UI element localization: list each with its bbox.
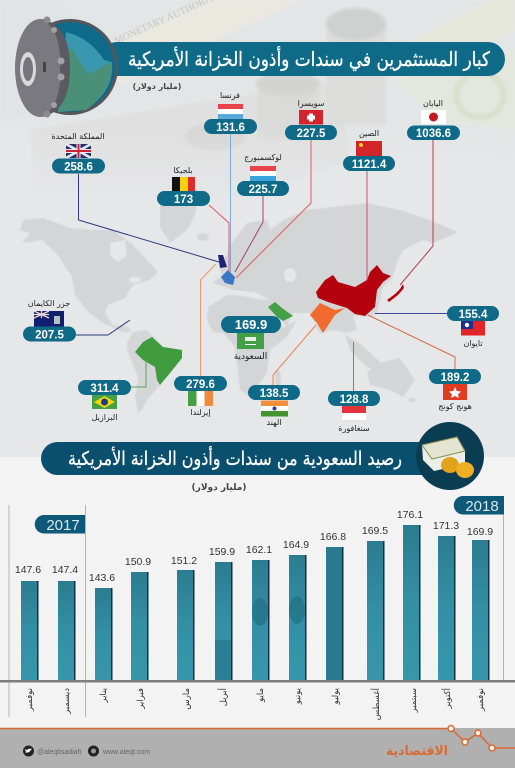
investor: singapore: 128.8 [340, 394, 369, 406]
bar: november 2017: 147.6 [15, 564, 41, 576]
year separators [9, 496, 504, 717]
investor: united kingdom [51, 132, 105, 174]
bar: june 2018 [283, 539, 309, 680]
bar: april 2018 [209, 546, 235, 680]
bar: february 2018 [125, 556, 151, 680]
month labels: أغسطس [370, 688, 382, 720]
investor: china: 1121.4 [352, 159, 387, 171]
section 2 title text: رصيد السعودية من سندات وأذون الخزانة الأمريكية [68, 446, 402, 470]
line: belgium [209, 205, 229, 272]
line: switzerland [236, 140, 311, 278]
investor: japan: 1036.6 [416, 128, 451, 140]
line: singapore [352, 342, 354, 391]
investor: india: الهند [267, 418, 281, 427]
map: north america [20, 218, 158, 332]
month labels: يناير [99, 687, 109, 704]
investor: hong kong: 189.2 [441, 372, 469, 384]
country: japan [387, 284, 404, 302]
bar: november 2018: 169.9 [467, 526, 493, 538]
bar: february 2018: 150.9 [125, 556, 151, 568]
bar: march 2018: 151.2 [171, 555, 197, 567]
investor: belgium: بلجيكا [173, 166, 193, 175]
month labels: مارس [182, 688, 192, 710]
map: iceland [197, 233, 209, 241]
background photo: banknotes and coins [0, 0, 515, 200]
month labels: سبتمبر [409, 688, 419, 713]
logo: الاقتصادية [386, 744, 448, 759]
background: map section [0, 0, 515, 457]
icon: twitter [23, 746, 34, 756]
bar: march 2018 [171, 555, 197, 680]
month labels: يونيو [293, 687, 303, 705]
investor: brazil: البرازيل [92, 413, 117, 422]
map: africa [207, 295, 297, 397]
bar: october 2018: 171.3 [433, 520, 459, 532]
country: saudi arabia [268, 302, 293, 321]
year tab: 2018 [454, 496, 504, 515]
line: ireland [200, 264, 216, 376]
bar: june 2018: 164.9 [283, 539, 309, 551]
investor: switzerland: سويسرا [298, 99, 325, 108]
line: france [230, 134, 232, 272]
twitter handle: @aleqtisadiah [37, 749, 82, 756]
month labels: ديسمبر [62, 688, 72, 715]
investor: taiwan [447, 306, 499, 348]
subtitle: unit: (مليار دولار) [133, 82, 181, 91]
bar: september 2018: 176.1 [397, 509, 423, 521]
icon: bank vault door [15, 16, 118, 118]
country: france [221, 270, 235, 285]
line: luxembourg [235, 196, 263, 272]
bar: april 2018: 159.9 [209, 546, 235, 558]
icon: website [88, 746, 99, 756]
bar: august 2018: 169.5 [362, 525, 388, 537]
footer [0, 726, 515, 768]
month labels: نوفمبر [476, 688, 486, 712]
background: chart section [0, 457, 515, 728]
investor: taiwan: 155.4 [459, 309, 488, 321]
investor: cayman islands: 207.5 [35, 330, 64, 342]
investor: cayman islands [23, 299, 76, 342]
map highlighted countries [135, 255, 404, 385]
investor: china [343, 129, 395, 171]
investor: switzerland [285, 99, 337, 140]
investor: india: 138.5 [260, 388, 289, 400]
investor: france [204, 91, 257, 134]
investor: luxembourg [237, 153, 289, 196]
bar: may 2018 [246, 544, 272, 680]
investor: singapore: سنغافورة [338, 424, 370, 433]
year tab: 2018: 2018 [465, 498, 499, 515]
line: cayman islands [76, 320, 130, 335]
investor: saudi arabia: 169.9 [235, 317, 267, 332]
investor: brazil: 311.4 [90, 383, 119, 395]
map: greenland [160, 200, 197, 243]
subtitle: unit chart: (مليار دولار) [192, 483, 246, 493]
footer trend line [0, 726, 515, 751]
country: india [310, 303, 345, 333]
connector lines [76, 134, 455, 391]
bar: december 2017 [52, 564, 78, 680]
investor: luxembourg: 225.7 [249, 184, 277, 196]
bar: november 2017 [15, 564, 41, 680]
investor: singapore [328, 391, 380, 433]
map: hudson bay and lakes [110, 240, 296, 300]
month labels: أكتوبر [441, 688, 453, 709]
bar: may 2018: 162.1 [246, 544, 272, 556]
investor: india [248, 385, 300, 427]
bar: january 2018: 143.6 [89, 572, 115, 584]
investor: japan: اليابان [423, 99, 443, 108]
investor: france: 131.6 [216, 122, 245, 134]
investor: belgium [157, 166, 210, 206]
map: south america [127, 330, 182, 413]
photo fade into map background [0, 125, 515, 210]
bar: september 2018 [397, 509, 423, 680]
month labels: مايو [256, 688, 266, 703]
line: brazil [131, 358, 146, 387]
bar: july 2018: 166.8 [320, 531, 346, 543]
bar: july 2018 [320, 531, 346, 680]
section 2 title bar [41, 442, 441, 475]
investor: hong kong [429, 369, 481, 411]
investor: brazil [78, 380, 131, 422]
month labels: فبراير [136, 688, 146, 710]
month labels: أبريل [217, 688, 229, 706]
line: china [366, 171, 368, 280]
bar: january 2018 [89, 572, 115, 680]
map: madagascar [275, 370, 281, 386]
investor: luxembourg: لوكسمبورج [244, 153, 282, 162]
investor: united kingdom: المملكة المتحدة [51, 132, 105, 141]
investor: saudi arabia [221, 316, 281, 362]
icon: cash and coins [416, 422, 484, 490]
world map [20, 200, 458, 413]
investor: china: الصين [359, 129, 379, 138]
investor: cayman islands: جزر الكايمان [28, 299, 70, 308]
investor: taiwan: تايوان [463, 339, 483, 348]
bar: august 2018 [362, 525, 388, 680]
line: united kingdom [78, 174, 219, 262]
line: taiwan [375, 312, 447, 314]
country: china [316, 265, 391, 316]
year tab: 2017: 2017 [46, 517, 80, 534]
investor: ireland: 279.6 [186, 379, 215, 391]
month labels [25, 687, 486, 720]
chart axis [0, 680, 515, 682]
investor: ireland: إيرلندا [190, 408, 211, 418]
investor: japan [407, 99, 460, 140]
investor: united kingdom: 258.6 [64, 162, 93, 174]
title bar [100, 42, 505, 76]
year tab: 2017 [35, 515, 85, 534]
investor: france: فرنسا [220, 91, 240, 100]
country: brazil [135, 337, 182, 385]
investor: switzerland: 227.5 [297, 128, 326, 140]
map: australia [367, 358, 415, 397]
bar: october 2018 [433, 520, 459, 680]
investor: saudi arabia: السعودية [234, 352, 267, 362]
line: india [273, 325, 316, 385]
line: japan [400, 140, 433, 285]
month labels: يوليو [331, 687, 341, 705]
country: united kingdom [218, 255, 227, 268]
map: eurasia [213, 203, 458, 333]
map: southeast asia islands [345, 335, 395, 378]
investor: hong kong: هونج كونج [438, 402, 472, 411]
bar: november 2018 [467, 526, 493, 680]
month labels: نوفمبر [25, 688, 35, 712]
investor: belgium: 173 [174, 194, 193, 206]
investor: ireland [174, 376, 227, 418]
map: new zealand [408, 398, 416, 402]
bar: december 2017: 147.4 [52, 564, 78, 576]
bar chart [15, 509, 493, 680]
website url: www.aleqt.com [102, 749, 150, 756]
line: hong kong [368, 315, 455, 369]
